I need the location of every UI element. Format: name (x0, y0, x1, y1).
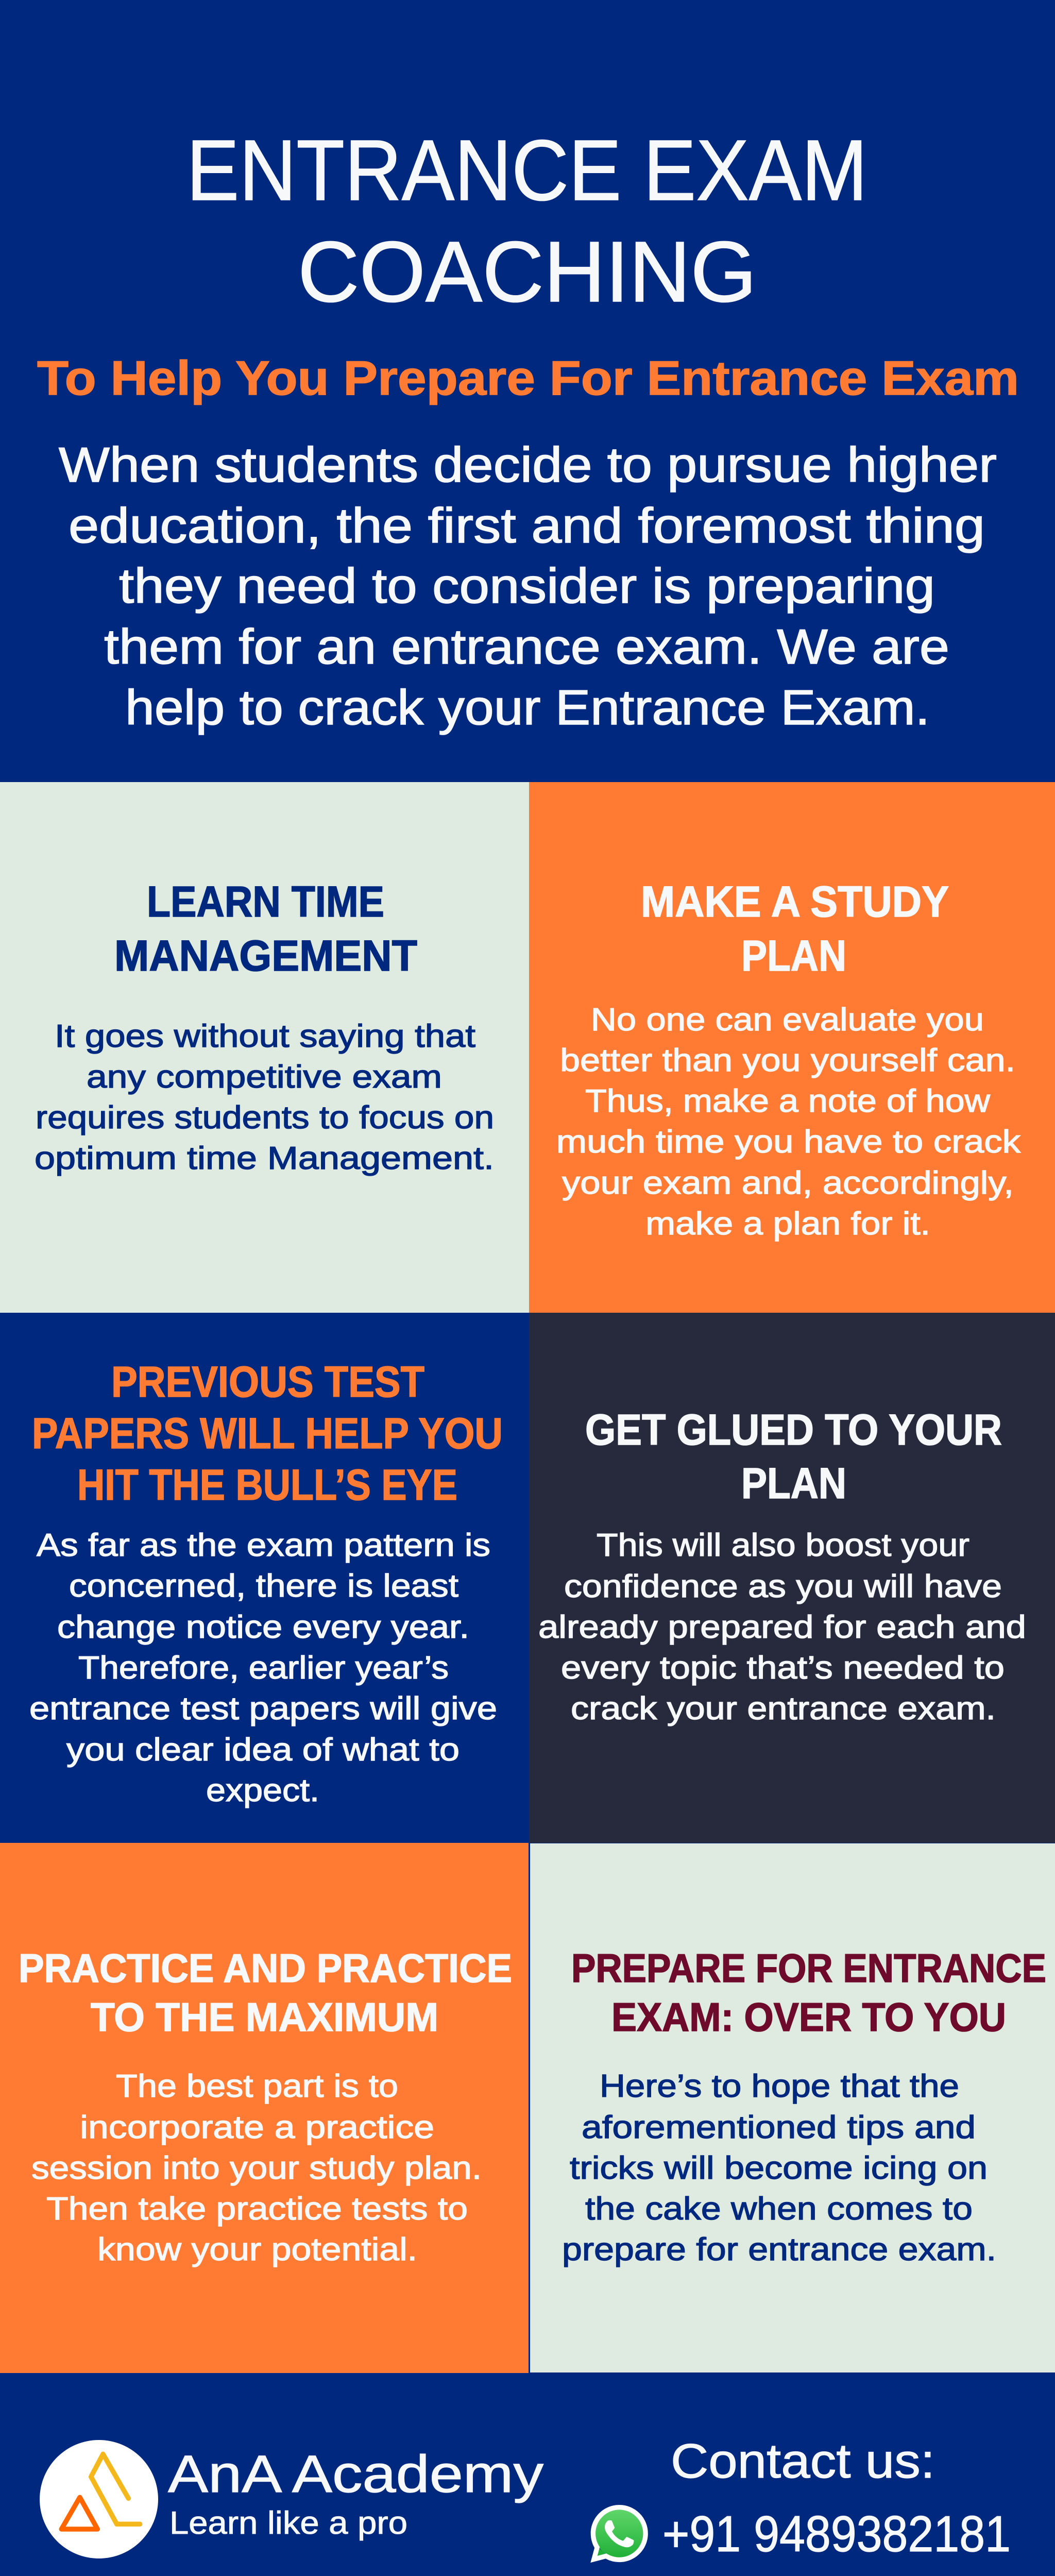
body text: previous test papers: change notice every year. (57, 1609, 469, 1645)
body text: previous test papers: Therefore, earlier year’s (78, 1650, 449, 1686)
heading: get glued to your plan: PLAN (741, 1459, 846, 1507)
body text: make a study plan: No one can evaluate you (591, 1002, 984, 1038)
panel: get glued to your plan (529, 1313, 1055, 1843)
heading: prepare for entrance exam (571, 1945, 1046, 2040)
body text: make a study plan: better than you yourself can. (560, 1043, 1015, 1078)
title (186, 123, 867, 320)
body text: practice and practice: session into your study plan. (31, 2150, 482, 2186)
title: COACHING (298, 224, 757, 320)
heading: learn time management: MANAGEMENT (114, 931, 417, 980)
intro text block: they need to consider is preparing (119, 558, 935, 614)
intro text block: education, the first and foremost thing (69, 498, 985, 553)
body text: make a study plan: much time you have to crack (556, 1124, 1021, 1160)
body text: practice and practice (31, 2069, 482, 2267)
heading: make a study plan: PLAN (741, 931, 846, 980)
body text: get glued to your plan: confidence as you will have (564, 1569, 1002, 1604)
heading: prepare for entrance exam: EXAM: OVER TO YOU (611, 1994, 1006, 2040)
panel: make a study plan (529, 782, 1055, 1313)
body text: make a study plan (556, 1002, 1021, 1242)
title: ENTRANCE EXAM (186, 123, 867, 218)
body text: previous test papers: expect. (206, 1773, 319, 1808)
heading: make a study plan: MAKE A STUDY (641, 877, 949, 926)
heading: learn time management (114, 877, 417, 980)
heading: practice and practice (19, 1945, 512, 2040)
body text: learn time management (35, 1019, 494, 1176)
tagline: Learn like a pro (169, 2505, 407, 2541)
heading: previous test papers (32, 1358, 503, 1509)
panel: previous test papers (0, 1313, 529, 1843)
body text: learn time management: It goes without saying that (55, 1019, 475, 1054)
heading: practice and practice: PRACTICE AND PRACTICE (19, 1945, 512, 1991)
body text: previous test papers: you clear idea of what to (66, 1732, 460, 1768)
body text: prepare for entrance exam (562, 2069, 996, 2267)
heading: previous test papers: PREVIOUS TEST (111, 1358, 424, 1406)
body text: prepare for entrance exam: aforementioned tips and (582, 2110, 976, 2145)
heading: learn time management: LEARN TIME (147, 877, 384, 926)
body text: learn time management: any competitive exam (87, 1059, 442, 1095)
body text: previous test papers: concerned, there is least (69, 1568, 458, 1604)
panel: learn time management (0, 782, 529, 1313)
body text: practice and practice: The best part is to (116, 2069, 398, 2104)
contact label: Contact us: (671, 2434, 935, 2488)
body text: make a study plan: your exam and, accordingly, (562, 1165, 1014, 1201)
brand name: AnA Academy (168, 2445, 543, 2503)
body text: practice and practice: Then take practice tests to (46, 2191, 468, 2227)
icon: AnA Academy logo (40, 2440, 158, 2558)
body text: previous test papers: entrance test papers will give (29, 1691, 497, 1726)
body text: learn time management: requires students to focus on (36, 1100, 494, 1136)
heading: practice and practice: TO THE MAXIMUM (91, 1994, 438, 2040)
heading: previous test papers: HIT THE BULL’S EYE (77, 1461, 457, 1509)
body text: prepare for entrance exam: tricks will become icing on (570, 2150, 988, 2186)
body text: get glued to your plan: already prepared for each and (538, 1609, 1026, 1645)
phone number: +91 9489382181 (662, 2505, 1011, 2562)
body text: get glued to your plan: crack your entrance exam. (571, 1691, 996, 1726)
body text: make a study plan: make a plan for it. (645, 1206, 930, 1242)
body text: previous test papers (29, 1528, 497, 1808)
heading: get glued to your plan: GET GLUED TO YOUR (585, 1405, 1002, 1454)
body text: make a study plan: Thus, make a note of how (585, 1083, 990, 1119)
body text: prepare for entrance exam: prepare for entrance exam. (562, 2232, 996, 2267)
panel: footer (0, 2373, 1055, 2576)
panel: prepare for entrance exam (530, 1843, 1055, 2372)
body text: learn time management: optimum time Management. (35, 1141, 494, 1176)
panel: header (0, 0, 1055, 782)
body text: practice and practice: incorporate a practice (80, 2110, 434, 2145)
body text: practice and practice: know your potential. (97, 2232, 417, 2267)
heading: get glued to your plan (585, 1405, 1002, 1507)
panel: practice and practice (0, 1843, 529, 2373)
heading: make a study plan (641, 877, 949, 980)
body text: get glued to your plan: This will also boost your (597, 1528, 969, 1563)
heading: previous test papers: PAPERS WILL HELP YOU (32, 1409, 503, 1458)
subtitle: To Help You Prepare For Entrance Exam (37, 351, 1019, 405)
intro text block (59, 437, 997, 735)
intro text block: help to crack your Entrance Exam. (125, 680, 930, 735)
intro text block: When students decide to pursue higher (59, 437, 997, 493)
body text: prepare for entrance exam: Here’s to hope that the (600, 2069, 959, 2104)
body text: prepare for entrance exam: the cake when comes to (585, 2191, 973, 2227)
icon: whatsapp (590, 2505, 648, 2563)
intro text block: them for an entrance exam. We are (104, 619, 949, 674)
body text: get glued to your plan (538, 1528, 1026, 1726)
body text: get glued to your plan: every topic that’s needed to (561, 1650, 1005, 1686)
body text: previous test papers: As far as the exam pattern is (37, 1528, 490, 1563)
